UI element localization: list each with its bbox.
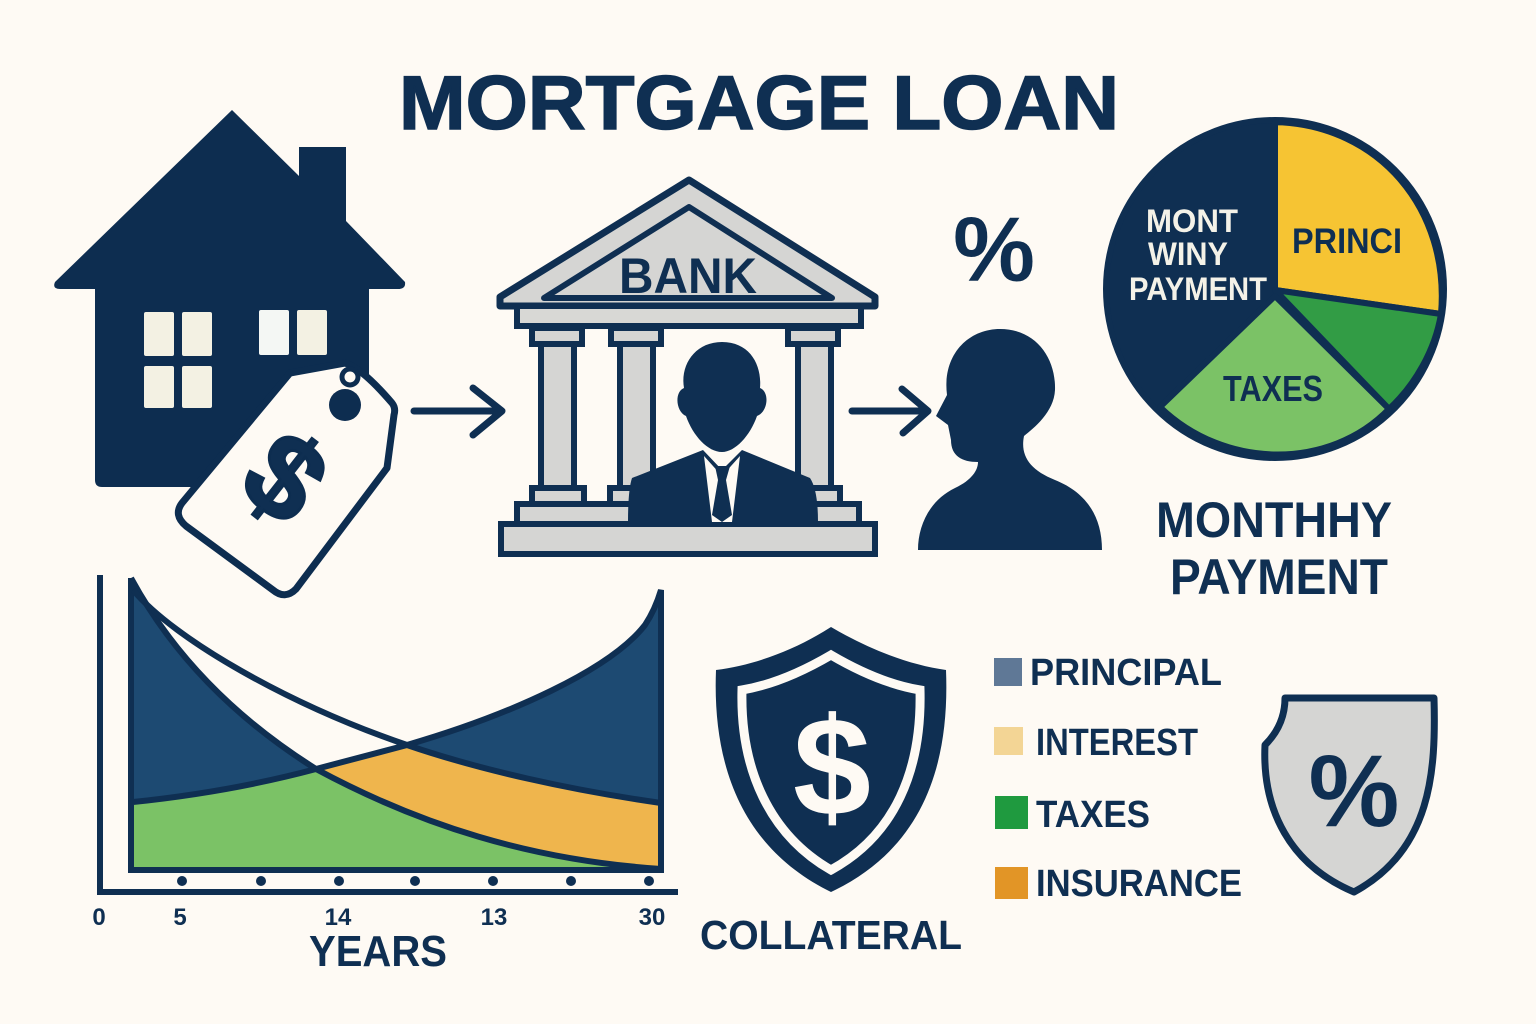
pie label: monthly payment: MONT xyxy=(1146,203,1238,239)
axis labels: 14 xyxy=(325,904,352,931)
pie label: monthly payment: PAYMENT xyxy=(1129,271,1267,307)
pie label: taxes: TAXES xyxy=(1223,368,1323,409)
legend: principal: PRINCIPAL xyxy=(1030,652,1222,694)
icon: bank building xyxy=(500,180,875,554)
pie label: monthly payment: WINY xyxy=(1148,236,1228,272)
legend: taxes xyxy=(995,794,1150,836)
icon: percent sign: % xyxy=(953,199,1035,301)
icon: collateral shield: $ xyxy=(793,688,871,845)
axis labels: 13 xyxy=(481,904,507,931)
pie chart: monthly payment xyxy=(1106,120,1444,458)
pie slice: taxes xyxy=(1160,296,1389,455)
icon: price tag xyxy=(178,363,395,595)
arrow: bank to borrower xyxy=(852,389,928,433)
legend: insurance: INSURANCE xyxy=(1036,863,1242,905)
icon: house with price tag xyxy=(54,110,405,595)
axis labels xyxy=(92,904,665,931)
banker silhouette xyxy=(628,342,818,522)
icon: collateral shield xyxy=(716,627,946,892)
pie slice: principal xyxy=(1275,122,1442,314)
legend: interest: INTEREST xyxy=(1036,722,1198,764)
area chart: amortization xyxy=(92,575,678,976)
chart axes xyxy=(100,575,678,892)
heading: monthly payment: MONTHHY xyxy=(1156,492,1392,548)
pie slice: dark green xyxy=(1275,290,1441,409)
icon: percent shield xyxy=(1265,698,1434,892)
legend: taxes: TAXES xyxy=(1036,794,1150,836)
legend xyxy=(994,652,1242,905)
title: MORTGAGE LOAN xyxy=(399,61,1119,146)
pie label: principal: PRINCI xyxy=(1292,222,1402,261)
axis labels: 5 xyxy=(173,904,187,931)
icon: borrower silhouette xyxy=(918,329,1102,550)
heading: monthly payment: PAYMENT xyxy=(1170,549,1388,605)
icon: price tag: $ xyxy=(218,405,351,550)
arrow: house to bank xyxy=(414,388,502,435)
axis labels: 30 xyxy=(639,904,665,931)
bank label: BANK xyxy=(619,248,757,304)
icon: percent shield: % xyxy=(1309,734,1399,848)
axis title: YEARS xyxy=(309,927,447,976)
axis labels: 0 xyxy=(92,904,106,931)
label: collateral: COLLATERAL xyxy=(700,912,962,958)
